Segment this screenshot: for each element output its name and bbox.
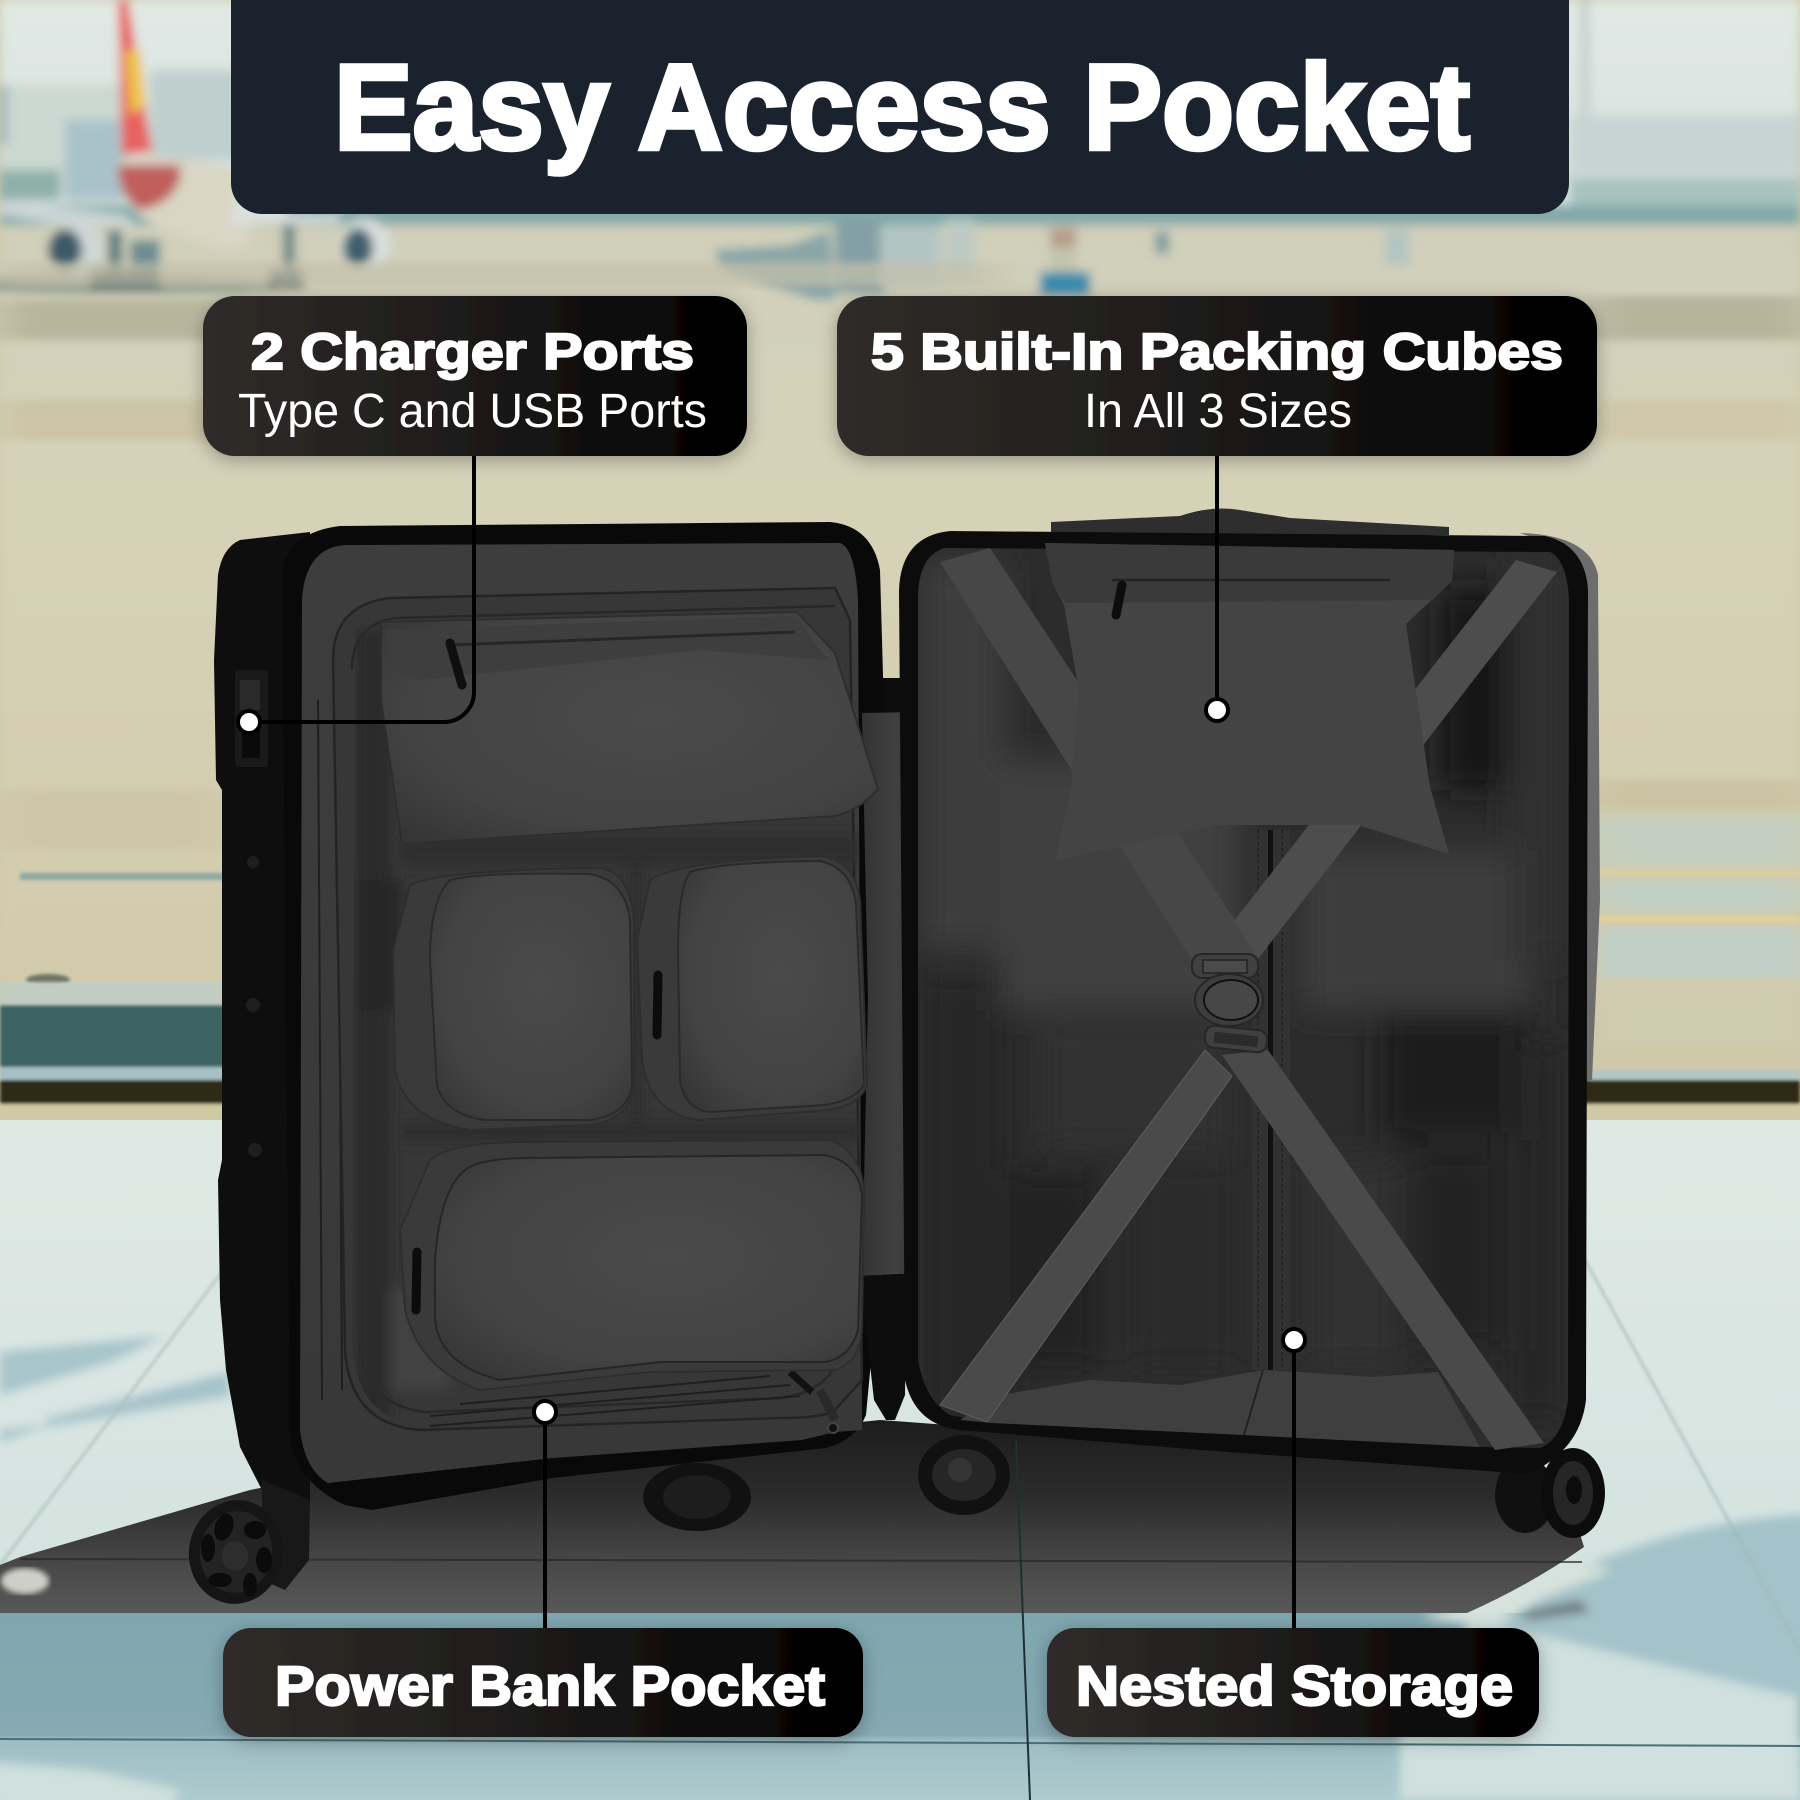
right side pale floor and blue shadow [0, 1514, 1800, 1800]
center zipper seam [1252, 830, 1290, 1370]
floor [0, 1120, 1800, 1800]
rear wheel left shell [643, 1463, 751, 1531]
top packing cube [381, 612, 878, 844]
lid rim [899, 531, 1588, 1473]
zipper pull [1116, 585, 1122, 615]
lower hinge [860, 1272, 925, 1420]
leader: power bank pocket [534, 1401, 556, 1628]
callout: 2 charger ports: 2 Charger Ports [251, 323, 694, 380]
window sill [0, 982, 1800, 1122]
sky, tarmac and airplane [0, 0, 1800, 1015]
title text: Easy Access Pocket [334, 39, 1470, 175]
zipper pull [657, 975, 658, 1035]
divider flap [862, 712, 925, 1276]
callout: 5 built-in packing cubes: In All 3 Sizes [1084, 385, 1352, 438]
large bottom cube [400, 1140, 864, 1390]
right small cube [637, 856, 867, 1120]
gap behind lids [878, 678, 902, 714]
leader: charger ports [238, 456, 474, 733]
leader: nested storage [1283, 1329, 1305, 1628]
ground equipment [715, 230, 835, 300]
left suitcase [181, 522, 925, 1622]
straps [940, 548, 1557, 1450]
bottom floor panel [960, 1370, 1480, 1447]
top handle [1051, 508, 1449, 535]
callout: power bank pocket: Power Bank Pocket [275, 1654, 825, 1717]
shell rivets [246, 856, 262, 1157]
charger port [235, 670, 268, 767]
lid interior panel [300, 543, 862, 1483]
front wheel [181, 1488, 316, 1622]
floor shadow under suitcase [0, 1420, 1584, 1613]
callout: 5 built-in packing cubes [837, 296, 1597, 456]
strap lower left [940, 1050, 1232, 1422]
lid interior [918, 548, 1569, 1448]
rear right wheels [1495, 1448, 1605, 1538]
right suitcase [899, 508, 1605, 1538]
callout: nested storage [1047, 1628, 1539, 1737]
lining with zip arch [333, 588, 862, 1430]
outer shell body [214, 532, 310, 1505]
airplane [118, 0, 152, 155]
leader: packing cubes [1206, 456, 1228, 721]
left small cube [393, 868, 634, 1130]
left seam stripes [318, 700, 342, 1400]
callout: 2 charger ports [203, 296, 747, 456]
leader lines [238, 456, 1305, 1628]
callout: nested storage: Nested Storage [1076, 1654, 1513, 1717]
lining folds [920, 560, 1560, 1420]
wheel leg [262, 1480, 310, 1590]
buckle [1192, 954, 1268, 1053]
shadow highlight patch [1, 1568, 49, 1594]
runway markings [20, 872, 1800, 986]
strap upper left [940, 548, 1258, 965]
callout: power bank pocket [223, 1628, 863, 1737]
pocket zip pull [790, 1372, 838, 1433]
callout: 5 built-in packing cubes: 5 Built-In Packing Cubes [871, 323, 1563, 380]
inner zip track [352, 606, 838, 1412]
lid rim [282, 522, 884, 1510]
bottom zipper rails [430, 1376, 800, 1426]
top packing cube [1045, 543, 1454, 861]
front right wheel [918, 1435, 1010, 1515]
zipper pull [416, 1252, 417, 1310]
title banner [231, 0, 1569, 214]
strap lower right [1222, 1050, 1544, 1450]
outer grey shell [1520, 533, 1600, 1080]
lining glossy shading [356, 630, 860, 1430]
zipper pull [450, 643, 462, 685]
strap upper right [1234, 560, 1557, 959]
callout: 2 charger ports: Type C and USB Ports [238, 385, 707, 438]
tarmac streaks [0, 262, 1800, 1045]
